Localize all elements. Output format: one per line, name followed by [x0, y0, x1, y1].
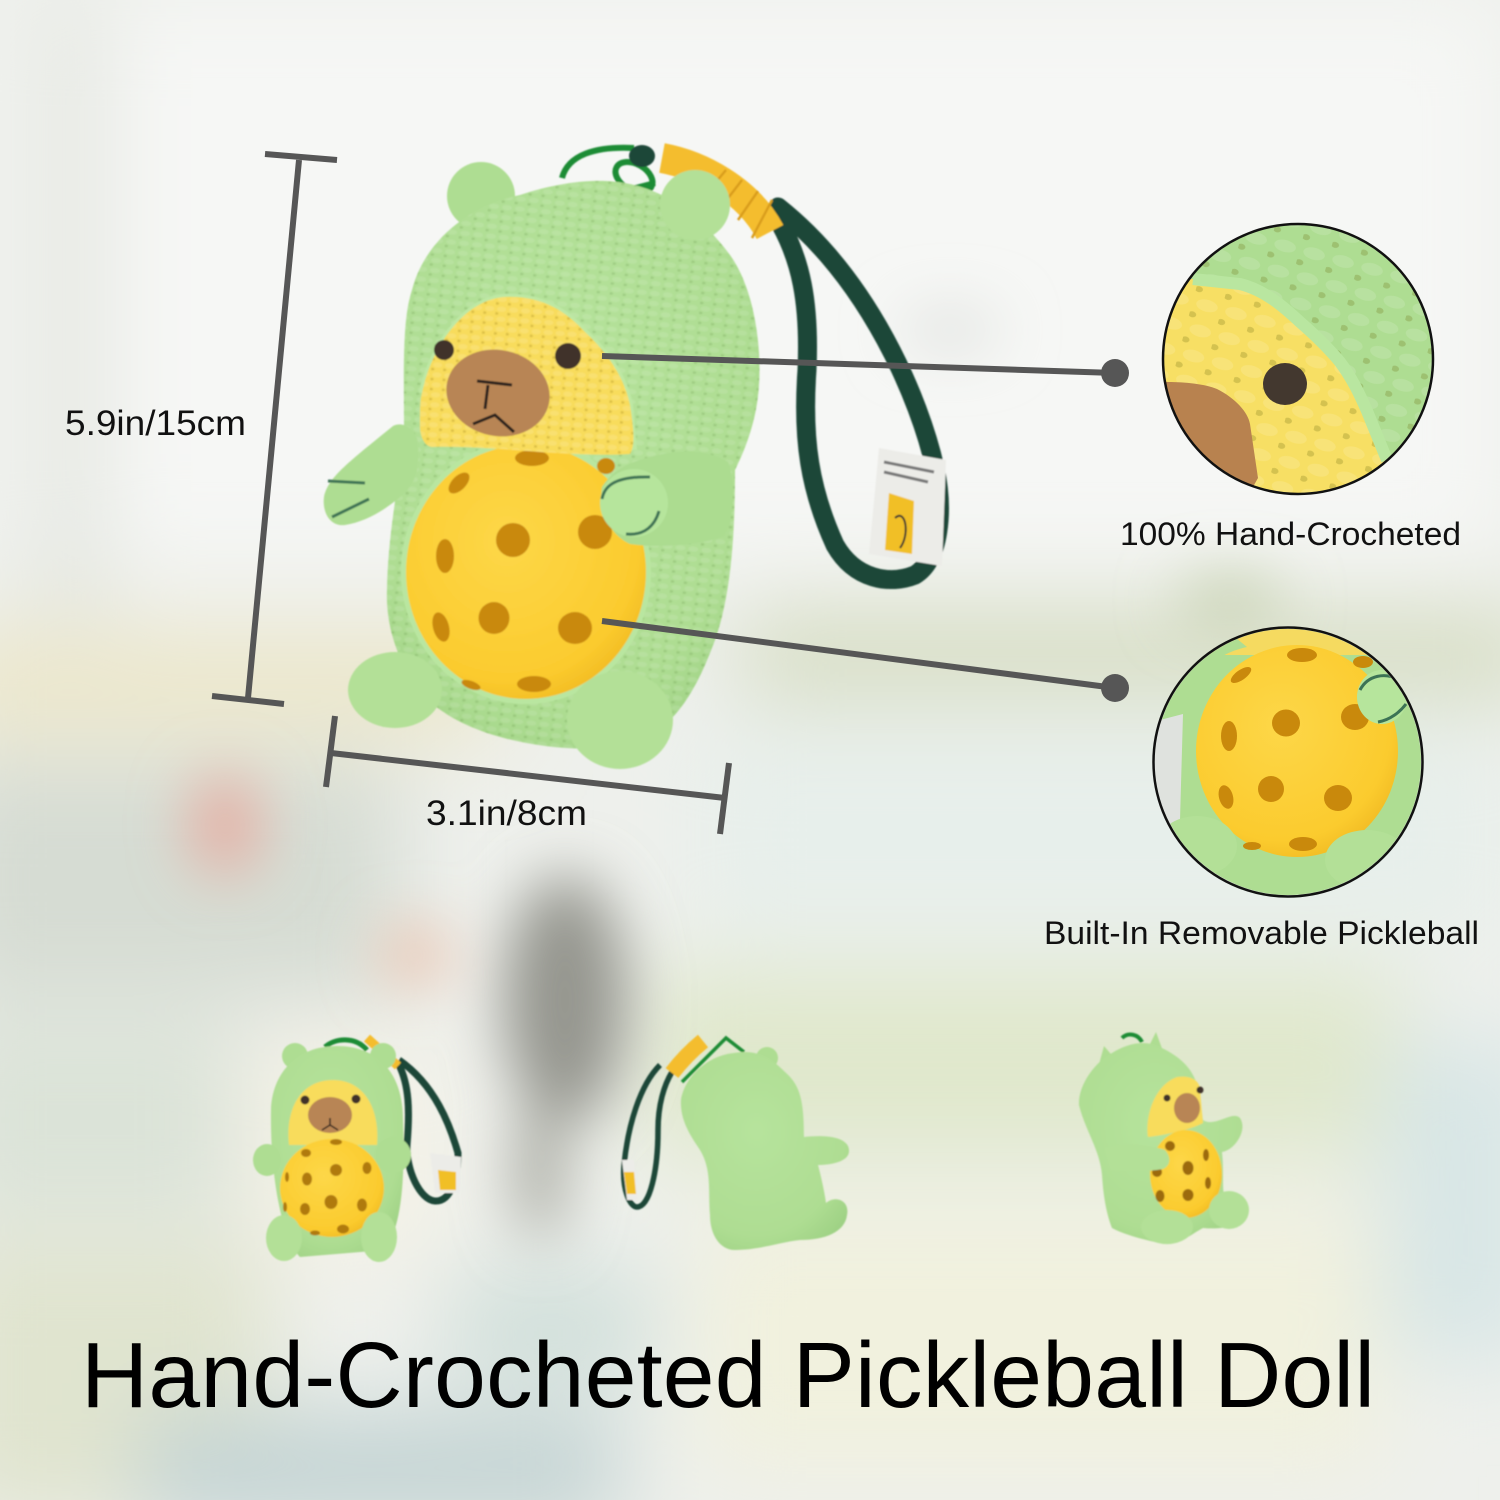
width dimension line — [326, 716, 729, 834]
callout line: pickleball — [602, 621, 1129, 702]
hood hem — [422, 297, 634, 450]
muzzle — [438, 340, 558, 446]
pickleball — [401, 440, 651, 704]
body — [387, 181, 760, 749]
thumbnail: front view — [253, 1038, 461, 1262]
callout line: hand-crocheted — [602, 356, 1129, 387]
eyes and mouth — [434, 340, 581, 432]
height dimension line — [212, 154, 337, 704]
left foot — [348, 652, 442, 728]
right arm — [600, 452, 733, 546]
right ear — [660, 170, 730, 240]
yellow face — [420, 297, 633, 455]
title: Hand-Crocheted Pickleball Doll — [81, 1323, 1375, 1427]
detail circle: crochet close-up — [1162, 222, 1434, 496]
left ear — [447, 162, 515, 230]
height label: 5.9in/15cm — [65, 404, 246, 443]
metal ring and clasp — [562, 145, 658, 198]
thumbnail: back view — [622, 1038, 849, 1250]
detail circle: pickleball close-up — [1150, 625, 1430, 905]
thumbnail: three-quarter view — [1079, 1032, 1249, 1244]
label: hand-crocheted: 100% Hand-Crocheted — [1120, 516, 1461, 552]
width label: 3.1in/8cm — [426, 794, 587, 833]
right foot — [567, 671, 673, 769]
strap tag — [869, 448, 946, 566]
main doll — [324, 145, 946, 769]
strap loop — [778, 207, 939, 580]
left arm — [324, 424, 418, 525]
label: pickleball: Built-In Removable Pickleball — [1044, 915, 1479, 951]
yellow cord wrap — [662, 158, 772, 238]
